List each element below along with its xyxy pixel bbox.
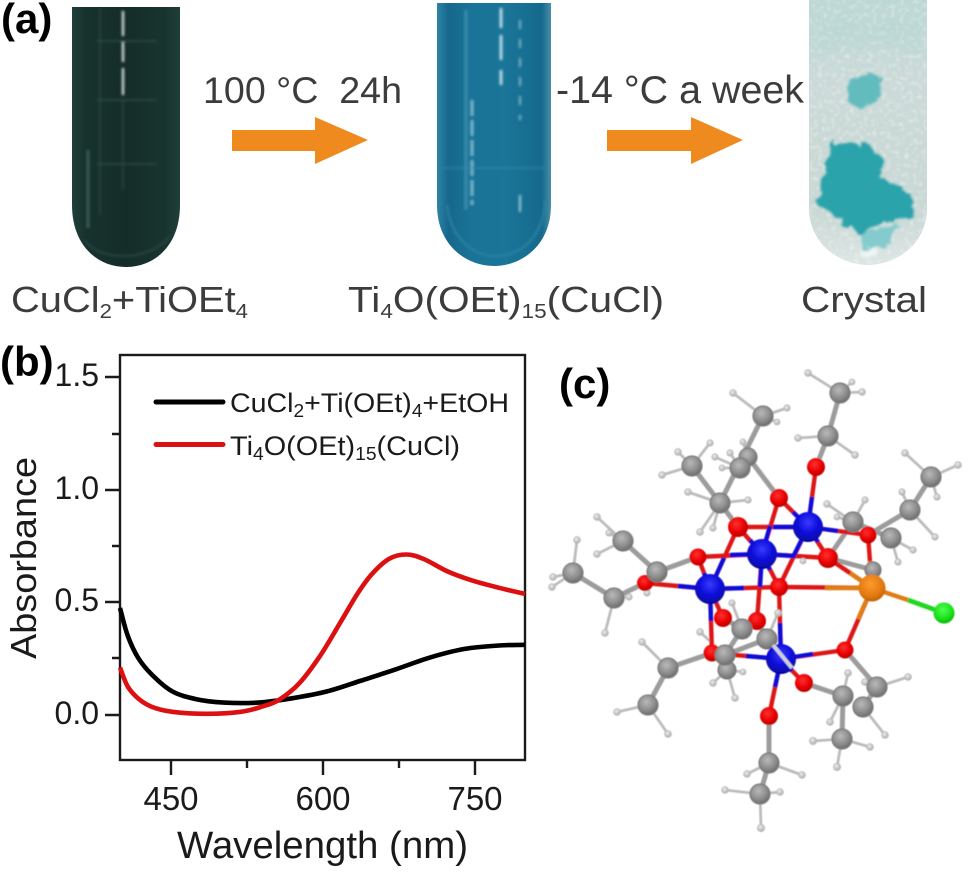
- copper-chlorine bond, chlorine half: [908, 600, 944, 613]
- legend: red label: 4: [253, 444, 264, 464]
- crystal: lower cluster: [817, 143, 914, 258]
- orange arrow 1: [232, 117, 368, 164]
- panel b: absorbance chart: [0, 338, 525, 867]
- plot frame: [120, 355, 525, 760]
- y tick labels: 1.5: [55, 357, 99, 393]
- x tick labels: 600: [295, 780, 351, 817]
- panel label c: (c): [559, 360, 610, 407]
- molecule model: [549, 370, 961, 832]
- red curve: [120, 554, 525, 714]
- crystal: upper cluster: [847, 70, 882, 108]
- legend: red line: [156, 442, 223, 447]
- titanium atoms: [695, 512, 823, 674]
- reaction condition 2: -14 °C a week: [556, 69, 804, 112]
- caption: solution: 4: [380, 301, 393, 323]
- caption: crystal: Crystal: [801, 279, 927, 320]
- x tick labels: [143, 780, 503, 817]
- x tick labels: 450: [143, 780, 199, 817]
- legend: black line: [156, 400, 223, 404]
- legend: black label: 2: [294, 401, 304, 421]
- legend: black label: CuCl: [230, 388, 290, 418]
- highlight bond across titanium: [773, 645, 792, 668]
- caption: solution: Ti: [348, 279, 377, 320]
- caption: solution: (CuCl): [547, 279, 664, 320]
- copper atom: [858, 574, 886, 602]
- metal bond halves: [678, 497, 838, 687]
- legend: black label: +Ti(OEt): [304, 388, 412, 418]
- y tick labels: [55, 357, 99, 731]
- black curve: [120, 608, 525, 703]
- caption: solution: 15: [522, 301, 547, 323]
- legend: red label: Ti: [230, 431, 252, 461]
- caption: precursor: 4: [236, 301, 248, 323]
- caption: precursor: +TiOEt: [112, 279, 236, 320]
- y tick labels: 0.0: [55, 695, 99, 731]
- y tick labels: 1.0: [55, 470, 99, 506]
- test tube: dark green solution: [72, 7, 180, 267]
- carbon bonds: [573, 393, 931, 794]
- orange arrow 2: [607, 117, 743, 164]
- y axis ticks: [105, 377, 120, 715]
- x tick labels: 750: [447, 780, 503, 817]
- reaction condition 1: 100 °C 24h: [203, 70, 402, 111]
- carbon atoms: [563, 383, 941, 804]
- panel c: molecular structure: [549, 360, 961, 832]
- y axis title: Absorbance: [3, 457, 44, 659]
- legend: red label: O(OEt): [264, 431, 355, 461]
- chlorine atom: [934, 602, 954, 624]
- x axis title: Wavelength (nm): [177, 825, 468, 867]
- legend: red label: 15: [355, 444, 377, 464]
- copper bond halves: [825, 561, 908, 619]
- test tube: crystal: [809, 0, 927, 265]
- panel a: synthesis steps: [1, 0, 927, 323]
- panel label b: (b): [0, 338, 54, 385]
- carbon-hydrogen bonds: [552, 373, 958, 828]
- y tick labels: 0.5: [55, 582, 99, 618]
- caption: solution: O(OEt): [393, 279, 522, 320]
- hydrogen atoms: [549, 370, 961, 832]
- caption: precursor: CuCl: [11, 279, 91, 320]
- test tube: blue solution: [437, 3, 551, 266]
- legend: [156, 388, 509, 464]
- caption: precursor: 2: [100, 301, 112, 323]
- legend: black label: +EtOH: [422, 388, 509, 418]
- x axis ticks: [171, 760, 475, 775]
- titanium-oxygen and copper-oxygen bonds, oxygen half: [645, 467, 872, 716]
- oxygen atoms: [637, 458, 876, 725]
- legend: black label: 4: [412, 401, 422, 421]
- legend: red label: (CuCl): [377, 431, 460, 461]
